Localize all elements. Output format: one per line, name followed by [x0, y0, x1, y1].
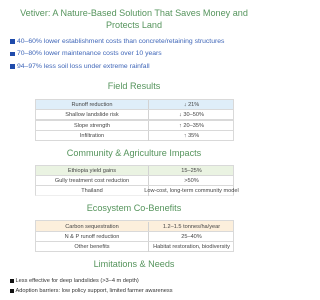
heading: field results: Field Results	[108, 81, 160, 91]
row: shallow landslide risk	[35, 109, 234, 120]
row: infiltration: Infiltration	[80, 132, 104, 138]
row: runoff reduction: Runoff reduction	[72, 102, 112, 108]
row: carbon sequestration: Carbon sequestration	[65, 224, 119, 230]
row: slope strength	[35, 120, 234, 131]
row: carbon sequestration: 1.2–1.5 tonnes/ha/year	[163, 224, 220, 230]
row: N and P runoff reduction: N & P runoff reduction	[65, 234, 119, 240]
row: N and P runoff reduction: 25–40%	[181, 234, 202, 240]
key benefit bullets: 94–97% less soil loss under extreme rainfall	[17, 62, 150, 70]
row: Thailand	[35, 185, 234, 196]
row: slope strength: Slope strength	[74, 122, 110, 128]
row: runoff reduction: ↓ 21%	[184, 102, 199, 108]
row: gully treatment cost reduction: >50%	[184, 178, 199, 184]
row: Thailand: Low-cost, long-term community model	[144, 188, 239, 194]
limitations bullets: Less effective for deep landslides (>3–4 m depth)	[16, 278, 139, 284]
row: Thailand: Thailand	[81, 188, 103, 194]
heading: limitations and needs: Limitations & Needs	[94, 258, 174, 268]
row: N and P runoff reduction	[35, 231, 234, 242]
row: other benefits: Habitat restoration, biodiversity	[153, 244, 230, 250]
row: gully treatment cost reduction	[35, 175, 234, 186]
limitations bullets	[10, 278, 173, 294]
row: Ethiopia yield gains: Ethiopia yield gains	[68, 168, 116, 174]
row: Ethiopia yield gains: 15–25%	[181, 168, 202, 174]
key benefit bullets	[10, 38, 224, 70]
table: ecosystem co-benefits	[35, 220, 234, 252]
title: Vetiver: A Nature-Based Solution That Saves Money and	[20, 8, 248, 18]
heading: ecosystem co-benefits: Ecosystem Co-Benefits	[87, 203, 181, 213]
table: field results	[35, 99, 234, 141]
row: infiltration	[35, 130, 234, 141]
row: runoff reduction	[35, 99, 234, 110]
title	[20, 8, 248, 30]
row: shallow landslide risk: Shallow landslide risk	[65, 112, 119, 118]
table: community and agriculture impacts	[35, 165, 239, 196]
row: infiltration: ↑ 35%	[184, 132, 199, 138]
key benefit bullets: 40–60% lower establishment costs than concrete/retaining structures	[17, 38, 224, 44]
row: other benefits: Other benefits	[74, 244, 110, 250]
row: gully treatment cost reduction: Gully treatment cost reduction	[55, 178, 129, 184]
title: Protects Land	[106, 20, 162, 30]
heading: community and agriculture impacts: Community & Agriculture Impacts	[67, 148, 201, 158]
row: shallow landslide risk: ↓ 30–50%	[179, 112, 204, 118]
limitations bullets: Adoption barriers: low policy support, limited farmer awareness	[16, 288, 173, 294]
row: other benefits	[35, 241, 234, 252]
row: Ethiopia yield gains	[35, 165, 234, 176]
row: carbon sequestration	[35, 220, 234, 232]
key benefit bullets: 70–80% lower maintenance costs over 10 years	[17, 50, 162, 57]
row: slope strength: ↑ 20–35%	[179, 122, 204, 128]
